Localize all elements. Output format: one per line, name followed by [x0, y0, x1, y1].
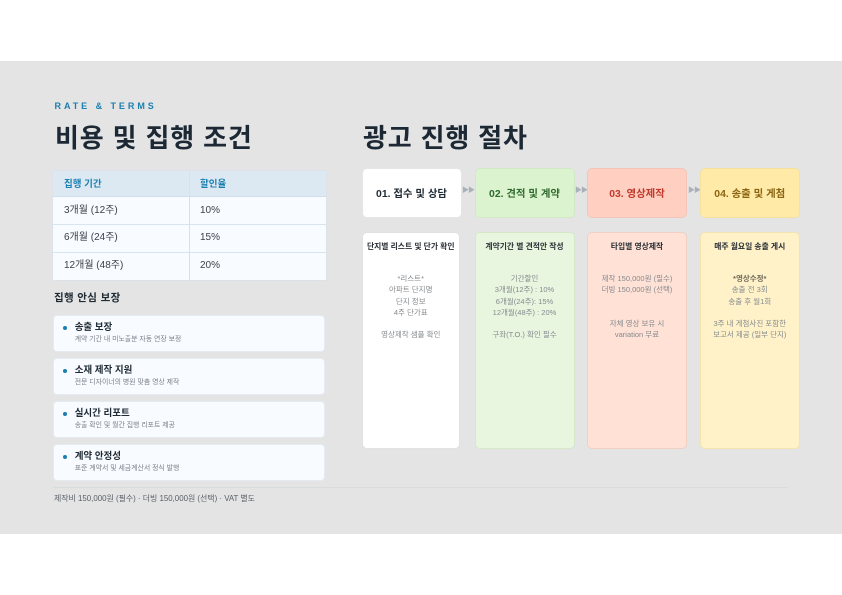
guarantee item 4: [53, 444, 325, 481]
detail card 4: [700, 232, 800, 449]
guarantee item 2: 전문 디자이너의 병원 맞춤 영상 제작: [75, 379, 179, 386]
table: rate and discount: 20%: [200, 260, 220, 271]
detail card 1: *리스트*: [397, 274, 424, 283]
table: rate and discount: 10%: [200, 205, 220, 216]
arrow 1: ▶▶: [462, 187, 474, 194]
background band: [0, 61, 842, 534]
step 2: [474, 168, 574, 218]
table: rate and discount: 6개월 (24주): [64, 232, 118, 243]
table: rate and discount: [53, 171, 326, 280]
guarantee item 3: [53, 401, 325, 438]
detail card 3: variation 무료: [615, 330, 659, 339]
table: rate and discount: 12개월 (48주): [64, 260, 123, 271]
detail card 2: 12개월(48주) : 20%: [493, 308, 556, 317]
guarantee item 1: 계약 기간 내 미노출분 자동 연장 보정: [75, 336, 181, 343]
detail card 3: 제작 150,000원 (필수): [602, 274, 672, 283]
step 1: [362, 168, 462, 218]
table: rate and discount: 할인율: [200, 178, 226, 190]
guarantee item 3: 실시간 리포트: [75, 408, 130, 419]
guarantee item 1: [53, 315, 325, 352]
heading: ad process: 광고 진행 절차: [363, 123, 528, 153]
detail card 1: 단지별 리스트 및 단가 확인: [367, 242, 455, 250]
detail card 4: 송출 전 3회: [732, 285, 768, 294]
detail card 3: [587, 232, 687, 449]
detail card 2: [474, 232, 574, 449]
detail card 1: 아파트 단지명: [389, 285, 432, 294]
detail card 2: 3개월(12주) : 10%: [495, 285, 554, 294]
step 1: 01. 접수 및 상담: [376, 189, 447, 200]
detail card 1: [362, 232, 460, 449]
detail card 3: 더빙 150,000원 (선택): [602, 285, 672, 294]
detail card 3: 자체 영상 보유 시: [610, 319, 664, 328]
table: rate and discount: 3개월 (12주): [64, 205, 118, 216]
table: rate and discount: 15%: [200, 232, 220, 243]
arrow 3: ▶▶: [688, 187, 700, 194]
detail card 4: *영상수정*: [733, 274, 766, 283]
detail card 4: 보고서 제공 (일부 단지): [713, 330, 786, 339]
detail card 3: 타입별 영상제작: [611, 242, 663, 250]
arrow 2: ▶▶: [575, 187, 587, 194]
detail card 2: 6개월(24주): 15%: [496, 297, 553, 306]
detail card 4: 매주 월요일 송출 게시: [714, 242, 785, 250]
guarantee item 4: 계약 안정성: [75, 451, 121, 462]
detail card 1: 4주 단가표: [394, 308, 428, 317]
detail card 4: 송출 후 월1회: [728, 297, 771, 306]
detail card 2: 계약기간 별 견적안 작성: [485, 242, 564, 250]
footer divider: [53, 487, 788, 488]
detail card 1: 단지 정보: [396, 297, 426, 306]
detail card 2: 기간할인: [511, 274, 538, 283]
step 3: 03. 영상제작: [609, 189, 665, 200]
guarantee item 1: 송출 보장: [75, 322, 112, 333]
guarantee item 2: [53, 358, 325, 395]
subheading: assurance: 집행 안심 보장: [54, 292, 121, 304]
guarantee item 3: 송출 확인 및 월간 집행 리포트 제공: [75, 422, 175, 429]
detail card 2: 구좌(T.O.) 확인 필수: [492, 330, 557, 339]
step 3: [587, 168, 687, 218]
detail card 4: 3주 내 게첨사진 포함한: [713, 319, 786, 328]
heading: cost and terms: 비용 및 집행 조건: [55, 123, 253, 153]
eyebrow label: RATE & TERMS: [54, 101, 157, 111]
footer note: 제작비 150,000원 (필수) · 더빙 150,000원 (선택) · VAT 별도: [54, 494, 255, 502]
detail card 1: 영상제작 샘플 확인: [381, 330, 440, 339]
step 4: 04. 송출 및 게첨: [714, 189, 785, 200]
guarantee item 4: 표준 계약서 및 세금계산서 정식 발행: [75, 465, 179, 472]
guarantee item 2: 소재 제작 지원: [75, 365, 132, 376]
table: rate and discount: 집행 기간: [64, 178, 102, 190]
step 2: 02. 견적 및 계약: [489, 189, 560, 200]
step 4: [700, 168, 800, 218]
